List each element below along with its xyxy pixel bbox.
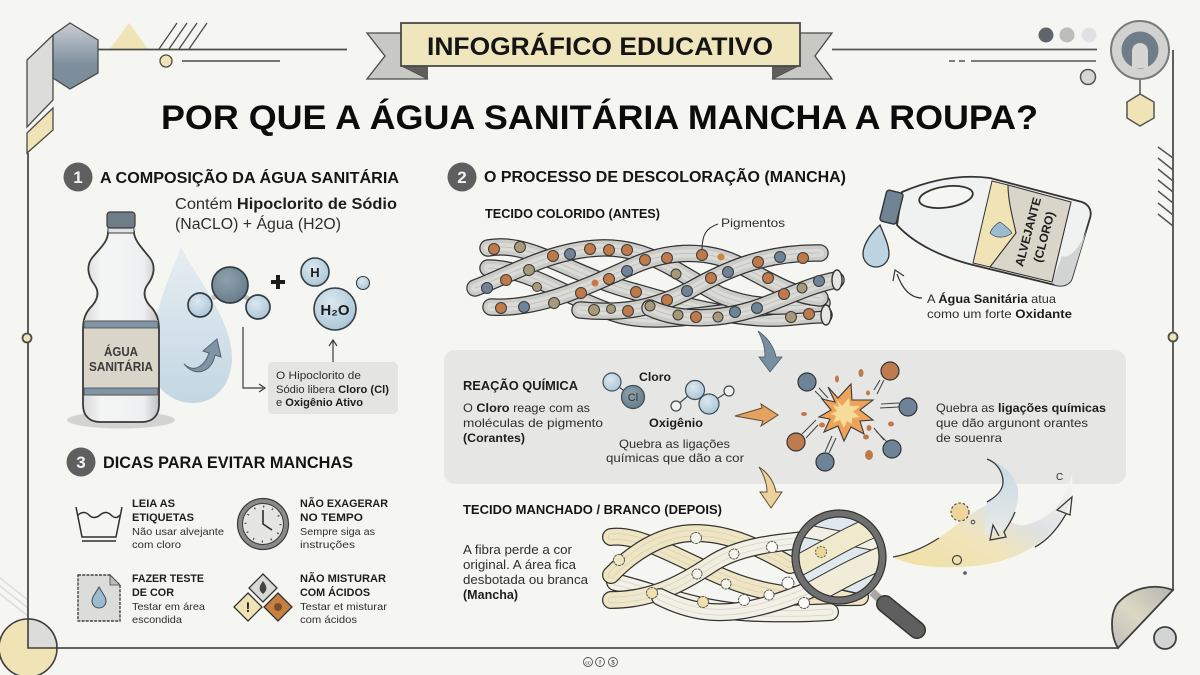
icon: hypochlorite molecule xyxy=(188,267,270,319)
callout: chlorine release: e Oxigênio Ativo xyxy=(276,397,363,409)
plus sign xyxy=(271,275,285,289)
callout: chlorine release xyxy=(268,362,398,414)
icon: bleach bottle: ÁGUA xyxy=(104,344,138,359)
arrow: yellow down xyxy=(759,467,782,508)
pigments label xyxy=(702,216,785,250)
icon: chlorine molecule: Cl xyxy=(628,392,638,404)
stained fabric text: desbotada ou branca xyxy=(463,573,588,587)
section 3 heading: DICAS PARA EVITAR MANCHAS xyxy=(103,453,353,472)
footer licence icons xyxy=(584,658,618,666)
bleached fibres xyxy=(611,532,870,613)
bond-breaking explanation: de souenra xyxy=(936,431,1002,445)
tip: read labels: Não usar alvejante xyxy=(132,526,224,538)
tip: do not mix with acids: com ácidos xyxy=(300,614,357,626)
reaction text: (Corantes) xyxy=(463,431,525,445)
bond-breaking explanation: que dão argunont orantes xyxy=(936,416,1088,430)
tip: do not mix with acids: COM ÁCIDOS xyxy=(300,586,370,599)
footer licence icons: cc xyxy=(585,660,591,666)
icon: bleach jug pouring xyxy=(879,177,1091,286)
callout: chlorine release: Sódio libera Cloro (Cl) xyxy=(276,384,389,396)
bond-breaking explanation xyxy=(936,401,1106,445)
icon: hazard diamonds xyxy=(234,574,292,621)
reaction text: O Cloro reage com as xyxy=(463,401,590,415)
tip: do not exceed time xyxy=(238,497,388,551)
coloured fibres with pigments xyxy=(475,242,842,325)
tip: do not exceed time: Sempre siga as xyxy=(300,526,375,538)
arrow to callout xyxy=(243,327,265,392)
footer licence icons: f xyxy=(599,660,601,666)
tip: do not mix with acids xyxy=(234,572,388,626)
top-left ornament xyxy=(27,23,347,153)
tip: color test: escondida xyxy=(132,614,182,626)
tip: color test: Testar em área xyxy=(132,601,205,613)
swoosh transformation arrows: C xyxy=(1056,472,1063,483)
bottom-right page curl xyxy=(1112,587,1176,649)
tip: color test xyxy=(78,573,205,626)
icon: water molecules xyxy=(301,258,370,330)
stained fabric text: original. A área fica xyxy=(463,558,576,572)
top-right ornament xyxy=(832,21,1173,226)
water drop background xyxy=(150,247,232,403)
bond-breaking explanation: Quebra as ligações químicas xyxy=(936,401,1106,415)
orange arrow xyxy=(735,404,778,426)
tip: read labels xyxy=(76,498,224,551)
label: chlorine: Cloro xyxy=(639,370,671,384)
section 1 heading xyxy=(64,162,399,192)
icon: falling drop xyxy=(863,225,889,267)
composition text: (NaCLO) + Água (H2O) xyxy=(175,216,341,233)
icon: water molecules: H xyxy=(310,265,320,280)
icon: wash tub xyxy=(76,507,122,541)
section 1: composition xyxy=(64,162,399,428)
bottom-left circle ornament xyxy=(0,619,57,675)
stained fabric text xyxy=(463,543,588,602)
decorative faint lines xyxy=(0,578,28,616)
tip: do not exceed time: instruções xyxy=(300,539,355,551)
section 3 heading xyxy=(66,448,353,476)
pigments label: Pigmentos xyxy=(721,216,785,230)
reaction text: REAÇÃO QUÍMICA xyxy=(463,378,578,393)
icon: bleach jug pouring: (CLORO) xyxy=(1031,210,1058,264)
tip: do not exceed time: NO TEMPO xyxy=(300,512,363,524)
section 2 heading xyxy=(448,162,846,192)
main title: POR QUE A ÁGUA SANITÁRIA MANCHA A ROUPA? xyxy=(161,97,1038,137)
composition text: Contém Hipoclorito de Sódio xyxy=(175,196,397,213)
title banner xyxy=(367,23,832,79)
oxidant note: A Água Sanitária atua xyxy=(927,291,1056,306)
reaction text: moléculas de pigmento xyxy=(463,416,603,430)
icon: water molecules: H₂O xyxy=(320,302,350,319)
icon: hazard diamonds: ! xyxy=(246,599,250,615)
icon: fabric swatch xyxy=(78,575,120,621)
label: coloured fabric before: TECIDO COLORIDO (ANTES) xyxy=(485,207,660,221)
tip: color test: FAZER TESTE xyxy=(132,573,204,585)
swoosh transformation arrows xyxy=(893,459,1072,575)
arrow: blue down xyxy=(758,331,782,372)
section 2 heading: O PROCESSO DE DESCOLORAÇÃO (MANCHA) xyxy=(484,166,846,186)
label: stained fabric after: TECIDO MANCHADO / BRANCO (DEPOIS) xyxy=(463,502,722,517)
icon: bleach bottle xyxy=(67,212,175,428)
icon: oxygen molecule xyxy=(671,380,734,414)
icon: clock xyxy=(238,498,288,550)
tip: do not mix with acids: Testar et misturar xyxy=(300,601,388,613)
arrow up to water xyxy=(329,340,337,362)
bond-breaking note: Quebra as ligações xyxy=(619,437,730,451)
bond-breaking note xyxy=(606,437,744,465)
section 1 heading: 1 xyxy=(73,168,83,187)
stained fabric text: A fibra perde a cor xyxy=(463,543,572,557)
title banner: INFOGRÁFICO EDUCATIVO xyxy=(427,32,773,61)
section 1 heading: A COMPOSIÇÃO DA ÁGUA SANITÁRIA xyxy=(100,167,399,187)
panel: chemical reaction xyxy=(444,350,1126,484)
composition text xyxy=(175,196,397,233)
callout: chlorine release: O Hipoclorito de xyxy=(276,370,361,382)
reaction text xyxy=(463,378,603,445)
tip: read labels: ETIQUETAS xyxy=(132,512,194,524)
bond-breaking note: químicas que dão a cor xyxy=(606,451,744,465)
oxidant note: como um forte Oxidante xyxy=(927,307,1072,321)
stained fabric text: (Mancha) xyxy=(463,588,518,602)
label: oxygen: Oxigênio xyxy=(649,416,703,430)
tip: color test: DE COR xyxy=(132,587,174,599)
icon: chlorine molecule xyxy=(603,373,644,408)
curved arrow xyxy=(184,339,221,372)
section 2 heading: 2 xyxy=(457,168,467,187)
icon: bleach jug pouring: ALVEJANTE xyxy=(1012,196,1044,268)
section 3 heading: 3 xyxy=(76,453,86,472)
tip: read labels: LEIA AS xyxy=(132,498,175,510)
tip: read labels: com cloro xyxy=(132,539,181,551)
tip: do not mix with acids: NÃO MISTURAR xyxy=(300,572,386,585)
icon: explosion xyxy=(787,362,917,471)
tip: do not exceed time: NÃO EXAGERAR xyxy=(300,497,388,510)
icon: magnifying glass xyxy=(790,510,917,630)
section 3: tips xyxy=(66,448,388,626)
footer licence icons: $ xyxy=(611,660,615,666)
icon: bleach bottle: SANITÁRIA xyxy=(89,359,153,374)
oxidant note xyxy=(893,270,1072,321)
